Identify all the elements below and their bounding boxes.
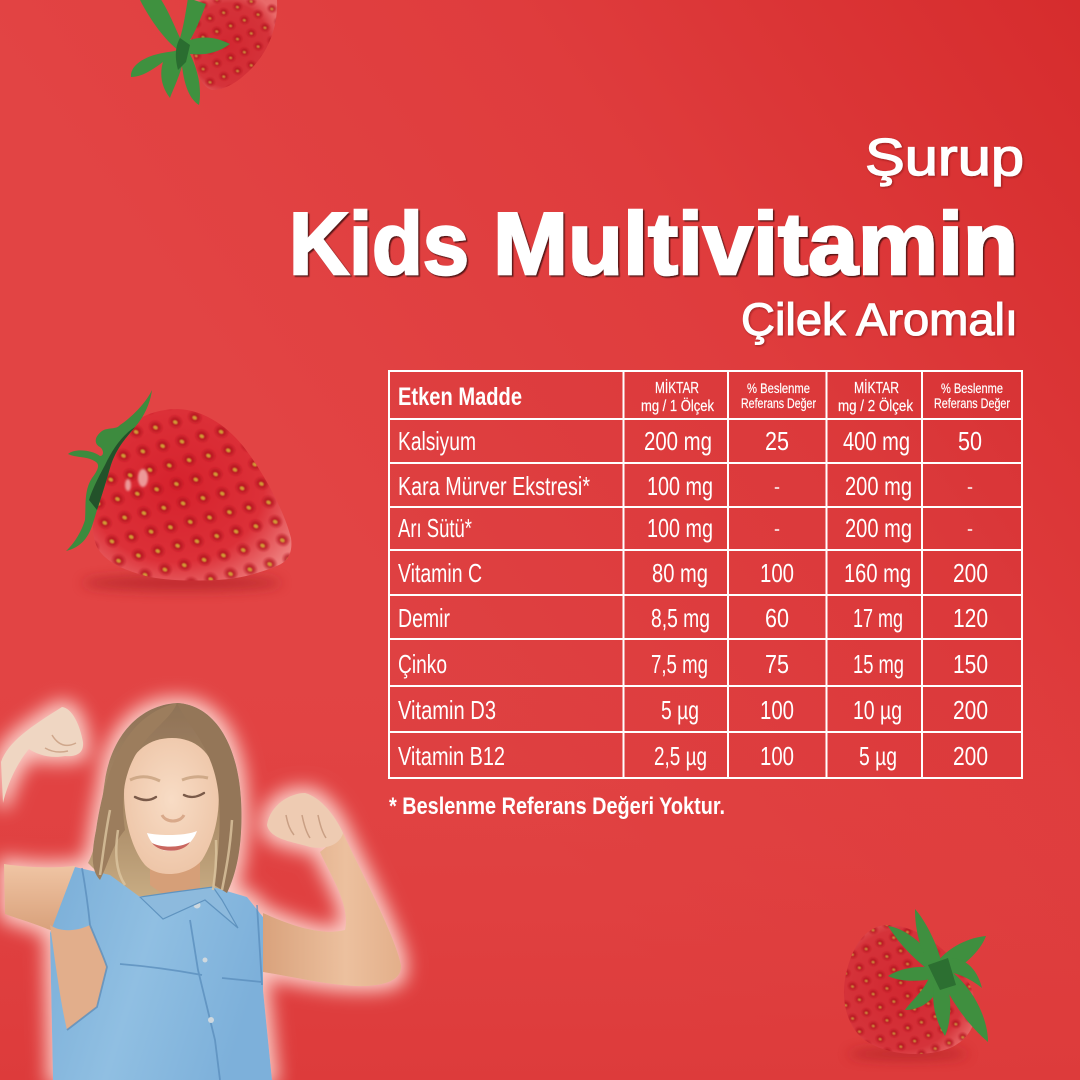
shirt seams <box>67 868 262 1080</box>
table header row: % Beslenme <box>747 380 810 396</box>
row: Çinko <box>398 649 988 679</box>
upper arm, left <box>4 864 92 932</box>
shirt placket buttons <box>194 902 214 1023</box>
strawberry: top <box>131 0 285 105</box>
row: Arı Sütü: Arı Sütü* <box>398 513 472 543</box>
collar <box>140 887 238 928</box>
row: Kara Mürver Ekstresi: 100 mg <box>647 471 713 501</box>
row: Arı Sütü: - <box>967 513 973 543</box>
face <box>124 738 219 874</box>
strawberry shadow <box>848 1048 968 1060</box>
eyebrows <box>130 777 208 781</box>
row: Kara Mürver Ekstresi: Kara Mürver Ekstresi* <box>398 471 590 501</box>
row: Arı Sütü: 100 mg <box>647 513 713 543</box>
table header row: % Beslenme <box>941 380 1003 396</box>
closed eyes <box>135 793 204 800</box>
row: Kara Mürver Ekstresi <box>398 471 973 501</box>
row: Çinko: 7,5 mg <box>651 649 708 679</box>
strawberry: bottom right <box>838 909 988 1060</box>
table header row: MİKTAR <box>655 378 699 397</box>
table header row: mg / 2 Ölçek <box>838 397 914 415</box>
row: Kalsiyum: 200 mg <box>644 426 712 456</box>
row: Kara Mürver Ekstresi: - <box>967 471 973 501</box>
row: Kalsiyum <box>398 426 982 456</box>
row: Çinko: 150 <box>953 649 988 679</box>
row: Demir: 60 <box>765 603 789 633</box>
row: Demir: 17 mg <box>853 603 903 633</box>
row: Vitamin B12: 100 <box>760 741 794 771</box>
strawberry leaves <box>66 390 152 551</box>
row: Kalsiyum: 400 mg <box>843 426 910 456</box>
row: Vitamin D3: 10 µg <box>853 695 902 725</box>
strawberry body <box>93 409 291 581</box>
row: Demir: 120 <box>953 603 988 633</box>
heading <box>289 129 1024 345</box>
blond streaks <box>100 810 232 890</box>
row: Demir: 8,5 mg <box>651 603 710 633</box>
table grid <box>388 371 1023 778</box>
row: Vitamin C: 200 <box>953 558 988 588</box>
heading line: Şurup: Şurup <box>865 129 1024 187</box>
row: Kara Mürver Ekstresi: 200 mg <box>845 471 912 501</box>
row: Arı Sütü: - <box>774 513 780 543</box>
row: Vitamin C <box>398 558 988 588</box>
armhole skin <box>50 925 107 1030</box>
neck <box>150 860 200 903</box>
table header row <box>398 378 1010 415</box>
row: Kara Mürver Ekstresi: - <box>774 471 780 501</box>
footnote: * Beslenme Referans Değeri Yoktur. <box>389 793 725 820</box>
row: Demir: Demir <box>398 603 450 633</box>
table header row: Referans Değer <box>741 395 816 411</box>
row: Vitamin D3: Vitamin D3 <box>398 695 496 725</box>
row: Vitamin C: Vitamin C <box>398 558 482 588</box>
row: Vitamin B12: 2,5 µg <box>654 741 707 771</box>
heading line: Çilek Aromalı: Çilek Aromalı <box>741 294 1018 345</box>
row: Kalsiyum: 25 <box>765 426 789 456</box>
table header row: mg / 1 Ölçek <box>641 397 715 415</box>
strawberry leaves <box>888 909 988 1042</box>
row: Demir <box>398 603 988 633</box>
nutrition table <box>388 371 1023 778</box>
hair front strands <box>93 703 177 880</box>
row: Kalsiyum: 50 <box>958 426 982 456</box>
row: Vitamin C: 80 mg <box>652 558 708 588</box>
row: Vitamin C: 100 <box>760 558 794 588</box>
row: Vitamin B12: 5 µg <box>859 741 897 771</box>
strawberry body <box>844 925 976 1054</box>
nose <box>162 815 184 821</box>
denim shirt <box>50 867 272 1080</box>
right arm <box>263 833 401 986</box>
hair back <box>88 703 241 900</box>
table header row: MİKTAR <box>854 378 899 397</box>
lower lip <box>152 842 190 851</box>
raised arm and fist, left <box>1 707 83 803</box>
row: Vitamin D3: 100 <box>760 695 794 725</box>
row: Çinko: 15 mg <box>853 649 904 679</box>
row: Vitamin C: 160 mg <box>844 558 911 588</box>
row: Arı Sütü: 200 mg <box>845 513 912 543</box>
row: Vitamin B12: Vitamin B12 <box>398 741 505 771</box>
row: Vitamin D3 <box>398 695 988 725</box>
fist finger lines <box>45 735 76 752</box>
table header row: Referans Değer <box>934 395 1010 411</box>
illustration: flexing girl <box>1 703 401 1080</box>
table header row: Etken Madde <box>398 383 522 411</box>
row: Vitamin B12 <box>398 741 988 771</box>
row: Çinko: Çinko <box>398 649 447 679</box>
heading line: Multivitamin: Multivitamin <box>493 194 1018 293</box>
row: Vitamin B12: 200 <box>953 741 988 771</box>
row: Çinko: 75 <box>765 649 789 679</box>
right fist finger lines <box>286 815 326 838</box>
fist, right <box>267 793 343 848</box>
strawberry shadow <box>82 575 282 591</box>
smile <box>147 831 197 851</box>
heading line: Kids: Kids <box>289 194 469 293</box>
row: Vitamin D3: 200 <box>953 695 988 725</box>
row: Vitamin D3: 5 µg <box>661 695 699 725</box>
row: Arı Sütü <box>398 513 973 543</box>
strawberry: left large <box>66 390 300 591</box>
row: Kalsiyum: Kalsiyum <box>398 426 476 456</box>
